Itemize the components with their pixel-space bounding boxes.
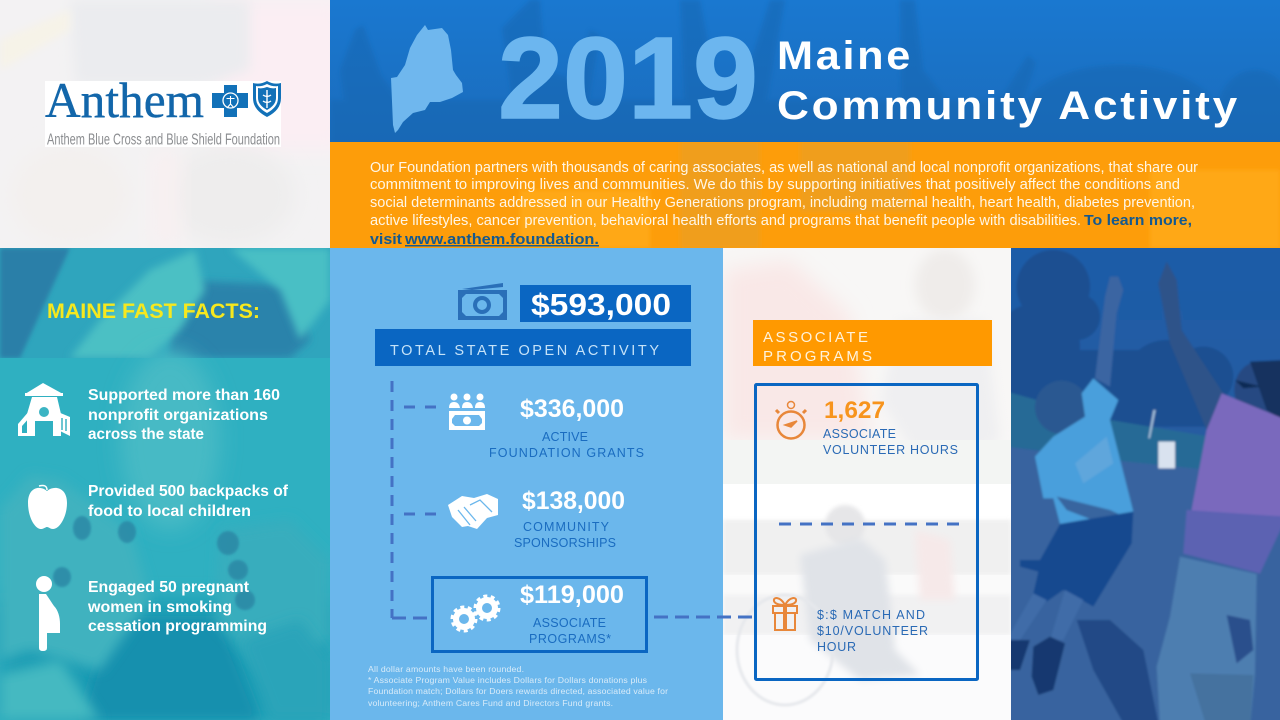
text block: foundation intro: Our Foundation partners with thousands of caring associates, as well as national and local nonprofit organizations, that share our [370, 159, 1198, 176]
text block: foundation intro: social determinants addressed in our Healthy Generations program, including maternal health, heart health, diabetes prevention, [370, 194, 1195, 211]
callout: total amount: $593,000 [531, 287, 671, 322]
text: fact about nonprofits: Supported more than 160 [88, 387, 280, 404]
title: Maine Community Activity [777, 34, 1240, 128]
panel: associate programs amount box: PROGRAMS* [529, 632, 611, 646]
title: 2019: 2019 [498, 13, 758, 143]
text block: foundation intro: To learn more, [1084, 212, 1192, 229]
panel: associate programs amount box: $119,000 [520, 581, 624, 609]
connector: dashed to associate box [654, 616, 752, 618]
text: active foundation grants: ACTIVE [542, 430, 588, 444]
heading: associate programs [753, 320, 992, 366]
panel: intro band background [330, 142, 1280, 248]
text: match details: $:$ MATCH AND [817, 608, 925, 622]
icon: money [458, 283, 507, 320]
heading: associate programs: ASSOCIATE [763, 329, 868, 346]
text block: foundation intro: commitment to improving lives and communities. We do this by supporting initiatives that positively affect the conditions and [370, 176, 1180, 193]
text: volunteer hours: 1,627 [824, 397, 885, 424]
text: active foundation grants: $336,000 [520, 395, 624, 423]
text: community sponsorships: SPONSORSHIPS [514, 536, 616, 550]
logo: Anthem Blue Cross and Blue Shield Foundation: Anthem [45, 72, 204, 128]
panel: total activity [330, 248, 723, 720]
text block: foundation intro: visit [370, 231, 402, 248]
icon: stopwatch [776, 402, 806, 438]
heading: associate programs: PROGRAMS [763, 348, 872, 365]
text: fact about nonprofits [88, 387, 280, 443]
heading: Maine fast facts: MAINE FAST FACTS: [47, 299, 260, 323]
text block: foundation intro: www.anthem.foundation. [404, 231, 599, 248]
logo: Anthem Blue Cross and Blue Shield Foundation [45, 72, 281, 148]
text: fact about pregnant women [87, 579, 267, 635]
title: Maine Community Activity: Maine [777, 34, 913, 78]
text: volunteer hours: VOLUNTEER HOURS [823, 443, 958, 457]
text block: foundation intro: active lifestyles, cancer prevention, behavioral health efforts and programs that benefit people with disabilities. [370, 212, 1081, 229]
text: fact about backpacks: Provided 500 backpacks of [88, 483, 289, 500]
text: match details: $10/VOLUNTEER [817, 624, 928, 638]
text: active foundation grants: FOUNDATION GRANTS [489, 446, 644, 460]
panel: associate programs amount box [432, 578, 646, 652]
text: fact about nonprofits: nonprofit organizations [88, 407, 268, 424]
text: fact about backpacks: food to local children [88, 503, 251, 520]
text block: foundation intro [370, 159, 1198, 248]
heading: total state open activity: TOTAL STATE OPEN ACTIVITY [390, 343, 659, 359]
panel: associate details box [756, 384, 978, 680]
text: fact about backpacks [88, 483, 289, 520]
icon: gift [773, 598, 797, 630]
text: match details: HOUR [817, 640, 856, 654]
panel: high-five photo [993, 243, 1280, 720]
text: match details [817, 608, 928, 654]
panel: associate programs amount box: ASSOCIATE [533, 616, 606, 630]
connector: dashed tree [392, 381, 440, 618]
icon: handshake [448, 494, 498, 529]
panel: associate photo background [723, 248, 1011, 720]
text: volunteer hours: ASSOCIATE [823, 427, 896, 441]
text: fact about nonprofits: across the state [88, 426, 204, 443]
text block: footnote: Foundation match; Dollars for Doers rewards directed, associated value for [368, 686, 668, 696]
panel: title header background [330, 0, 1280, 142]
text: fact about pregnant women: Engaged 50 pregnant [88, 579, 249, 596]
panel: logo photo background [0, 0, 345, 248]
divider: dashed line [779, 522, 960, 526]
icon: playground [18, 383, 70, 436]
logo: Anthem Blue Cross and Blue Shield Foundation: Anthem Blue Cross and Blue Shield Foundation [47, 132, 280, 148]
text block: footnote: * Associate Program Value includes Dollars for Dollars donations plus [368, 675, 648, 685]
text: community sponsorships: $138,000 [522, 487, 625, 515]
icon: gears [452, 596, 499, 631]
text: active foundation grants [489, 395, 644, 460]
icon: pregnant woman [36, 576, 60, 651]
text block: footnote: volunteering; Anthem Cares Fund and Directors Fund grants. [368, 698, 613, 708]
text block: footnote: All dollar amounts have been rounded. [368, 664, 524, 674]
text: fact about pregnant women: women in smoking [87, 599, 232, 616]
text: volunteer hours [823, 397, 958, 457]
text: fact about pregnant women: cessation programming [88, 618, 267, 635]
text: community sponsorships [514, 487, 625, 550]
heading: total state open activity [375, 329, 691, 366]
icon: apple [28, 486, 67, 529]
text block: footnote [368, 664, 668, 708]
text: community sponsorships: COMMUNITY [523, 520, 610, 534]
panel: fast facts photo background [0, 248, 330, 720]
title: Maine Community Activity: Community Activity [777, 84, 1240, 128]
icon: Maine state map [391, 25, 463, 133]
icon: people and money [449, 394, 485, 430]
